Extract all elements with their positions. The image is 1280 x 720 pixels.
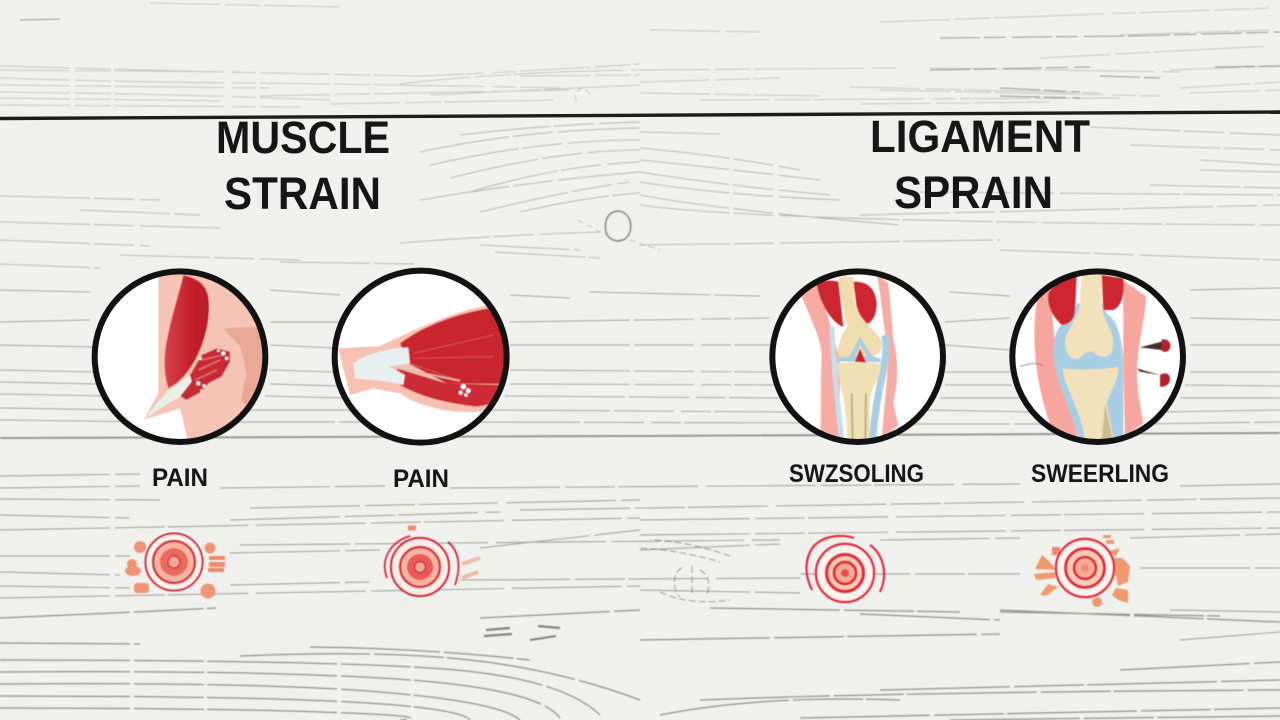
icon: pain target 1 xyxy=(125,534,225,598)
label: swelling 1: SWZSOLING xyxy=(789,460,924,488)
illustration: knee sprain, right xyxy=(1012,271,1183,443)
label: pain 2: PAIN xyxy=(393,465,449,493)
illustration: knee sprain, left xyxy=(772,271,943,443)
icon: pain target 2 xyxy=(385,528,480,596)
illustration: torn muscle, left xyxy=(95,270,270,450)
heading: ligament sprain xyxy=(870,111,1090,218)
label: swelling 2: SWEERLING xyxy=(1031,460,1169,488)
heading: muscle strain: MUSCLE xyxy=(216,112,390,163)
illustration: strained muscle, right xyxy=(335,271,510,443)
knots xyxy=(605,211,631,241)
icon: swelling target 1 xyxy=(807,536,884,602)
heading: muscle strain xyxy=(216,112,390,219)
heading: ligament sprain: SPRAIN xyxy=(894,167,1053,218)
icon: swelling target 2 xyxy=(1034,535,1130,607)
divider line under top plank xyxy=(0,112,1280,118)
arrows xyxy=(1140,342,1162,350)
label: pain 1: PAIN xyxy=(152,464,208,492)
heading: muscle strain: STRAIN xyxy=(224,168,381,219)
heading: ligament sprain: LIGAMENT xyxy=(870,111,1090,162)
